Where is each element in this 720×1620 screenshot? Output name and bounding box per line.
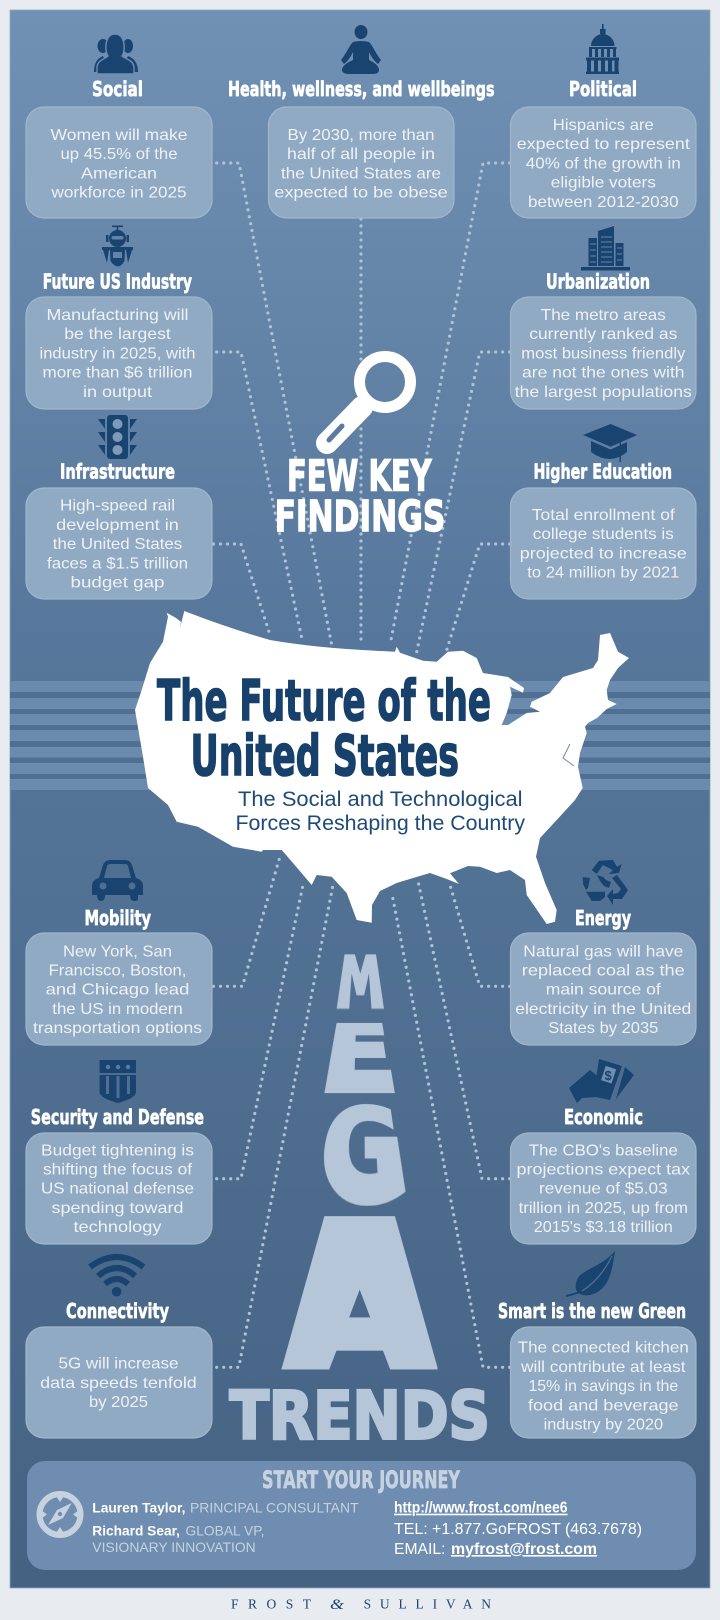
text box: workforce in 2025 — [50, 185, 187, 202]
text box — [510, 297, 696, 409]
heading: mega: M — [329, 947, 392, 1035]
text box: trillion in 2025, up from — [519, 1200, 688, 1217]
text box: electricity in the United — [515, 1001, 691, 1018]
panel: future us industry — [26, 226, 212, 409]
heading: Security and Defense — [31, 1105, 204, 1129]
text box: by 2025 — [89, 1394, 148, 1411]
heading: few key findings: FEW KEY — [287, 452, 432, 502]
text box: the US in modern — [52, 1001, 183, 1018]
text box: 2015's $3.18 trillion — [534, 1219, 673, 1236]
icon: buildings — [581, 226, 630, 270]
panel: health — [228, 25, 494, 218]
text box: eligible voters — [551, 175, 656, 192]
map of the United States — [135, 611, 629, 924]
text box: industry in 2025, with — [40, 345, 196, 362]
panel: social — [26, 34, 212, 218]
icon: car — [92, 860, 143, 901]
subtitle: Forces Reshaping the Country — [236, 812, 526, 835]
heading: Social — [92, 77, 143, 101]
text box — [510, 933, 696, 1045]
icon: meditation — [341, 25, 381, 74]
panel: smart is the new green — [498, 1251, 696, 1438]
text box — [510, 107, 696, 218]
text box: food and beverage — [528, 1397, 679, 1414]
text box: projections expect tax — [517, 1162, 690, 1178]
text box: By 2030, more than — [288, 127, 434, 144]
subtitle — [236, 788, 526, 835]
names and titles: PRINCIPAL CONSULTANT — [190, 1500, 359, 1516]
text box: are not the ones with — [522, 365, 685, 382]
heading: start your journey: START YOUR JOURNEY — [262, 1466, 460, 1494]
text box: up 45.5% of the — [60, 146, 178, 163]
heading: Health, wellness, and wellbeings — [228, 77, 494, 101]
panel: energy — [510, 860, 696, 1045]
text box — [26, 107, 212, 218]
heading: Future US Industry — [43, 270, 192, 294]
text box: Budget tightening is — [41, 1142, 194, 1159]
heading: mega: G — [305, 1092, 421, 1250]
icon: hand with money: $ — [604, 1068, 612, 1083]
heading: Economic — [564, 1105, 643, 1129]
text box: spending toward — [52, 1200, 184, 1217]
text box: expected to represent — [517, 136, 690, 153]
text box: New York, San — [63, 943, 172, 960]
icon: compass — [40, 1494, 80, 1535]
heading: Connectivity — [66, 1299, 169, 1323]
text box — [26, 297, 212, 409]
text box: industry by 2020 — [544, 1416, 663, 1434]
text box: 15% in savings in the — [528, 1378, 678, 1395]
icon: shield — [100, 1060, 136, 1103]
heading: Political — [569, 77, 637, 101]
text box: faces a $1.5 trillion — [47, 555, 188, 572]
logo: frost and sullivan — [231, 1597, 491, 1613]
icon: robot — [102, 226, 133, 266]
text box: Francisco, Boston, — [49, 962, 186, 980]
text box: The metro areas — [541, 307, 666, 324]
text box: transportation options — [33, 1020, 202, 1037]
text box: most business friendly — [521, 345, 685, 362]
text box: 40% of the growth in — [526, 155, 681, 172]
icon: magnifying glass — [327, 356, 410, 443]
subtitle: The Social and Technological — [238, 788, 522, 811]
dotted connectors — [214, 163, 510, 1367]
text box: between 2012-2030 — [528, 194, 679, 211]
text box — [510, 488, 696, 599]
icon: recycle plug — [583, 860, 628, 905]
title: United States — [190, 724, 459, 789]
text box: budget gap — [70, 574, 165, 592]
contact details: http://www.frost.com/nee6 — [394, 1500, 568, 1517]
panel: security and defense — [26, 1060, 212, 1244]
text box: and Chicago lead — [46, 982, 189, 999]
text box — [510, 1133, 696, 1244]
heading: mega: A — [250, 1167, 469, 1395]
logo: frost and sullivan: SULLIVAN — [364, 1597, 491, 1612]
text box: in output — [83, 384, 153, 401]
panel: higher education — [510, 424, 696, 599]
icon: wifi — [90, 1257, 144, 1296]
text box — [26, 1327, 212, 1438]
heading: few key findings: FINDINGS — [275, 492, 445, 542]
text box: development in — [56, 517, 179, 534]
panel: connectivity — [26, 1257, 212, 1438]
heading: trends: TRENDS — [230, 1377, 490, 1454]
text box: the United States — [53, 536, 182, 553]
text box: to 24 million by 2021 — [527, 565, 679, 582]
text box: The connected kitchen — [518, 1340, 689, 1357]
heading: Urbanization — [546, 270, 650, 294]
names and titles: VISIONARY INNOVATION — [92, 1539, 256, 1555]
heading: Infrastructure — [60, 460, 175, 484]
text box: data speeds tenfold — [40, 1375, 197, 1392]
background stripes — [10, 681, 710, 790]
heading: Energy — [575, 906, 631, 930]
text box: projected to increase — [520, 545, 687, 562]
panel: political — [510, 24, 696, 218]
text box: Women will make — [50, 127, 188, 144]
icon: traffic light — [98, 415, 137, 459]
heading: mega: E — [309, 1013, 408, 1128]
text box — [26, 933, 212, 1045]
text box: be the largest — [64, 326, 171, 343]
text box: college students is — [533, 526, 674, 543]
text box: Natural gas will have — [523, 943, 683, 960]
text box — [26, 488, 212, 599]
logo: frost and sullivan: & — [330, 1597, 344, 1613]
text box: The CBO's baseline — [529, 1142, 678, 1159]
text box: replaced coal as the — [522, 962, 685, 980]
title: The Future of the — [157, 669, 491, 734]
text box — [26, 1133, 212, 1244]
text box: technology — [74, 1219, 162, 1236]
panel: contact — [27, 1461, 696, 1570]
title — [157, 669, 491, 789]
text box: US national defense — [41, 1181, 194, 1198]
text box — [268, 107, 454, 218]
contact details: TEL: +1.877.GoFROST (463.7678) — [394, 1521, 642, 1538]
icon: hand with money — [569, 1059, 634, 1103]
text box: revenue of $5.03 — [539, 1181, 668, 1198]
contact details: EMAIL: — [394, 1541, 445, 1558]
heading: few key findings — [275, 452, 445, 542]
contact details — [394, 1500, 642, 1558]
text box: shifting the focus of — [43, 1162, 193, 1178]
panel: urbanization — [510, 226, 696, 409]
panel: infrastructure — [26, 415, 212, 599]
text box: expected to be obese — [274, 185, 448, 202]
logo: frost and sullivan: FROST — [231, 1597, 312, 1612]
text box: the largest populations — [515, 384, 692, 401]
text box: the United States are — [281, 165, 441, 182]
icon: graduation cap — [583, 424, 637, 462]
text box: 5G will increase — [58, 1356, 179, 1373]
icon: capitol — [586, 24, 619, 74]
text box: main source of — [546, 982, 661, 999]
text box: American — [81, 165, 157, 182]
names and titles: GLOBAL VP, — [186, 1522, 264, 1538]
names and titles — [92, 1500, 359, 1555]
text box: High-speed rail — [60, 498, 175, 515]
contact details: myfrost@frost.com — [451, 1541, 597, 1558]
names and titles: Richard Sear, — [92, 1522, 180, 1538]
icon: leaf — [566, 1251, 615, 1296]
text box: Total enrollment of — [532, 507, 675, 524]
panel: mobility — [26, 860, 212, 1045]
text box: Hispanics are — [553, 117, 654, 134]
text box: currently ranked as — [529, 326, 677, 343]
text box — [510, 1327, 696, 1438]
names and titles: Lauren Taylor, — [92, 1500, 186, 1516]
text box: Manufacturing will — [46, 307, 188, 324]
text box: more than $6 trillion — [42, 365, 192, 382]
icon: social people — [94, 34, 138, 74]
text box: States by 2035 — [548, 1020, 658, 1037]
panel: economic — [510, 1059, 696, 1244]
heading: Mobility — [84, 906, 151, 930]
text box: half of all people in — [287, 146, 435, 163]
text box: will contribute at least — [520, 1359, 686, 1376]
